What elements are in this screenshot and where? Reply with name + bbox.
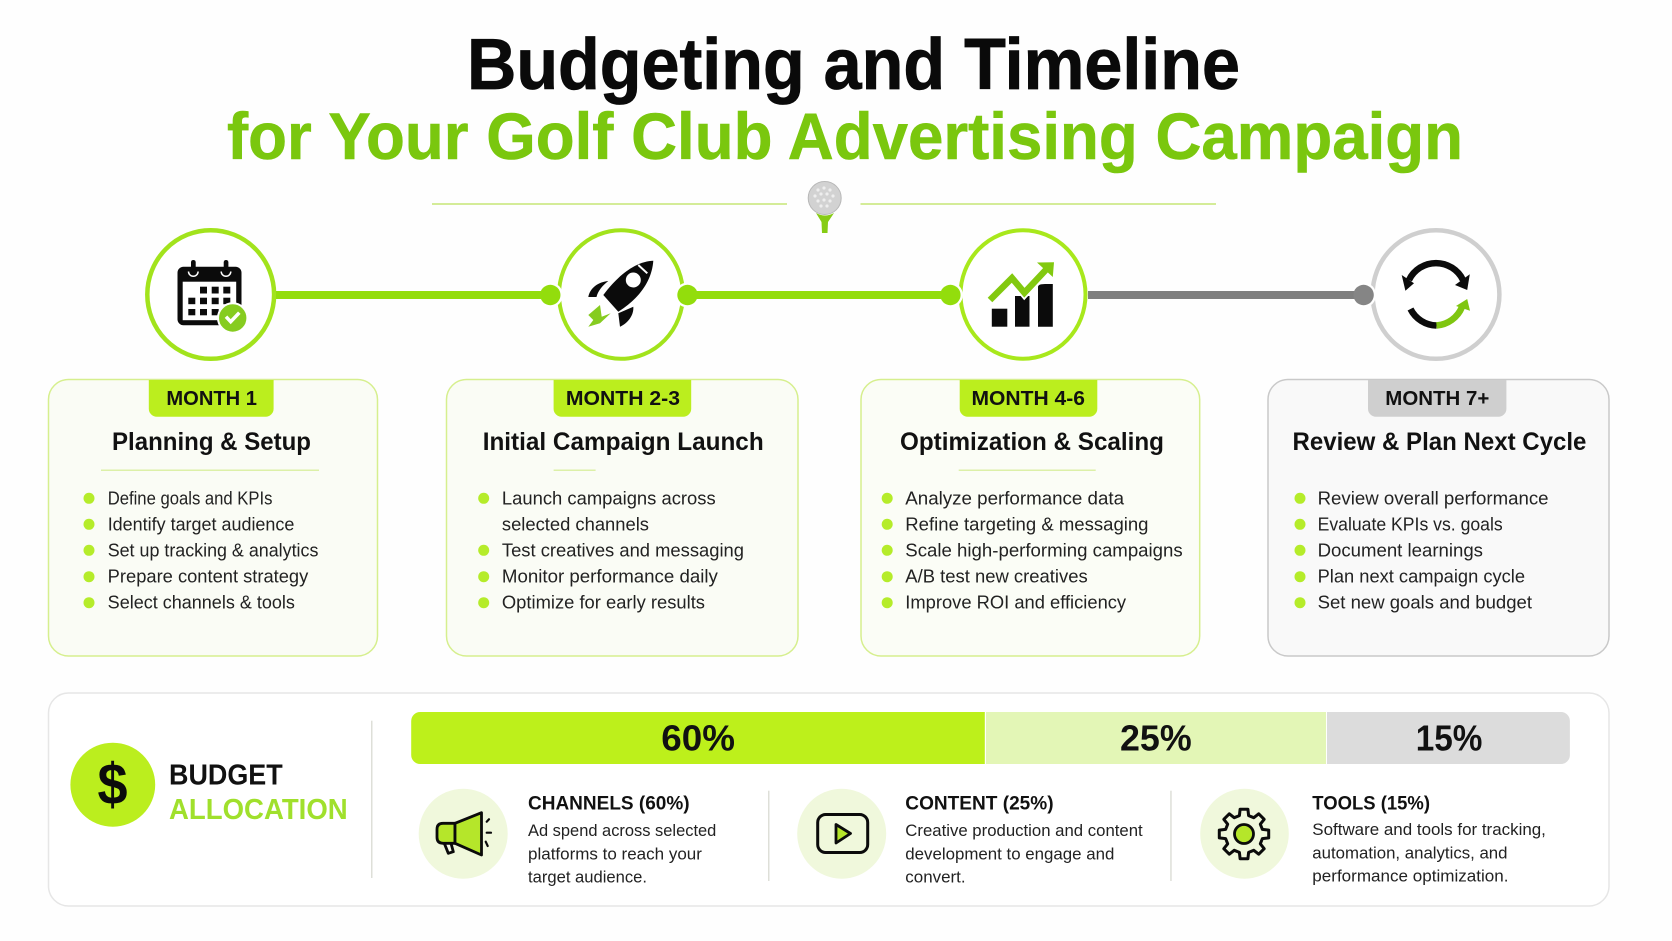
bullet list: month 7+ tasks: Document learnings (1318, 540, 1483, 560)
step circle: month 2-3 (559, 230, 683, 359)
panel: month 1 planning and setup (48, 380, 378, 656)
icon: play button (797, 789, 886, 879)
icon: rocket (588, 261, 653, 327)
text: tools (1312, 793, 1546, 886)
bullet list: month 2-3 tasks (478, 488, 744, 613)
stacked budget bar (411, 712, 1570, 764)
timeline dot 1 (540, 285, 560, 305)
panel: month 7+ review and plan next cycle (1268, 380, 1609, 656)
panel: month 2-3 initial campaign launch (446, 380, 798, 656)
text: channels (528, 793, 716, 886)
bullet list: month 1 tasks (84, 488, 318, 613)
badge: month 2-3: MONTH 2-3 (566, 388, 680, 410)
heading: budget allocation: BUDGET (169, 760, 283, 792)
badge: month 7+: MONTH 7+ (1385, 388, 1489, 410)
heading: budget allocation (169, 760, 348, 826)
bullet list: month 4-6 tasks: A/B test new creatives (905, 567, 1088, 587)
text: channels: CHANNELS (60%) (528, 793, 690, 814)
heading: review and plan next cycle: Review & Plan Next Cycle (1292, 428, 1586, 456)
text: content (905, 793, 1143, 886)
step circle: month 1 (147, 230, 274, 359)
title: Budgeting and Timeline (467, 25, 1240, 105)
badge: month 7+ (1368, 380, 1506, 417)
stacked budget bar: 60% (661, 718, 735, 759)
text: content: CONTENT (25%) (905, 793, 1054, 814)
bullet list: month 7+ tasks: Evaluate KPIs vs. goals (1318, 514, 1503, 534)
badge: month 4-6: MONTH 4-6 (972, 388, 1085, 410)
bullet list: month 1 tasks: Define goals and KPIs (108, 488, 272, 508)
step circle: month 7+ (1373, 230, 1499, 359)
heading: initial campaign launch: Initial Campaign Launch (483, 428, 764, 456)
badge: month 4-6 (960, 380, 1097, 417)
bullet list: month 2-3 tasks: Test creatives and messaging (502, 540, 744, 560)
text: content: Creative production and content (905, 821, 1143, 840)
bullet list: month 2-3 tasks: Launch campaigns across (502, 488, 716, 508)
timeline dot 4 (1353, 285, 1374, 305)
text: content: convert. (905, 867, 966, 886)
bullet list: month 1 tasks: Identify target audience (108, 514, 294, 534)
icon: dollar coin (70, 743, 155, 827)
title (227, 25, 1463, 173)
text: channels: platforms to reach your (528, 844, 702, 863)
badge: month 2-3 (554, 380, 691, 417)
icon: calendar with check (178, 260, 247, 333)
stacked budget bar: 15% (1416, 718, 1482, 759)
bullet list: month 2-3 tasks: Optimize for early results (502, 593, 705, 613)
text: tools: automation, analytics, and (1312, 843, 1508, 862)
text: tools: TOOLS (15%) (1312, 793, 1430, 814)
bullet list: month 1 tasks: Prepare content strategy (108, 567, 308, 587)
bullet list: month 7+ tasks (1294, 488, 1548, 613)
bullet list: month 7+ tasks: Review overall performance (1318, 488, 1548, 508)
text: tools: performance optimization. (1312, 867, 1508, 886)
icon: growth chart (990, 262, 1054, 327)
text: tools: Software and tools for tracking, (1312, 820, 1546, 839)
bullet list: month 7+ tasks: Set new goals and budget (1318, 593, 1532, 613)
icon: dollar coin: $ (98, 752, 128, 817)
bullet list: month 4-6 tasks (882, 488, 1183, 613)
text: channels: target audience. (528, 867, 647, 886)
title divider with golf ball on tee (432, 182, 1216, 233)
text: channels: Ad spend across selected (528, 821, 716, 840)
bullet list: month 4-6 tasks: Improve ROI and efficiency (905, 593, 1126, 613)
title: for Your Golf Club Advertising Campaign (227, 99, 1463, 173)
heading: planning and setup: Planning & Setup (112, 428, 311, 456)
timeline connector: month 4-6 to month 7+ (1088, 291, 1364, 299)
bullet list: month 4-6 tasks: Refine targeting & messaging (905, 514, 1148, 534)
icon: megaphone (419, 789, 508, 879)
bullet list: month 7+ tasks: Plan next campaign cycle (1318, 567, 1525, 587)
bullet list: month 1 tasks: Select channels & tools (108, 593, 295, 613)
heading: optimization and scaling: Optimization & Scaling (900, 428, 1164, 456)
bullet list: month 4-6 tasks: Scale high-performing campaigns (905, 540, 1183, 560)
bullet list: month 1 tasks: Set up tracking & analytics (108, 540, 318, 560)
step circle: month 4-6 (960, 230, 1086, 359)
heading: budget allocation: ALLOCATION (169, 794, 348, 826)
badge: month 1 (149, 380, 274, 417)
stacked budget bar: 25% (1120, 718, 1192, 759)
timeline dot 2 (677, 285, 698, 305)
icon: review cycle arrows (1402, 263, 1470, 326)
panel: month 4-6 optimization and scaling (861, 380, 1200, 656)
text: content: development to engage and (905, 844, 1114, 863)
timeline dot 3 (940, 285, 961, 305)
bullet list: month 2-3 tasks: Monitor performance daily (502, 567, 718, 587)
timeline connector: month 2-3 to month 4-6 (688, 291, 950, 299)
icon: gear (1200, 789, 1289, 879)
badge: month 1: MONTH 1 (166, 388, 257, 410)
panel: budget allocation (48, 693, 1609, 906)
bullet list: month 4-6 tasks: Analyze performance data (905, 488, 1125, 508)
bullet list: month 2-3 tasks: selected channels (502, 514, 649, 534)
timeline connector: month 1 to month 2-3 (276, 291, 550, 299)
